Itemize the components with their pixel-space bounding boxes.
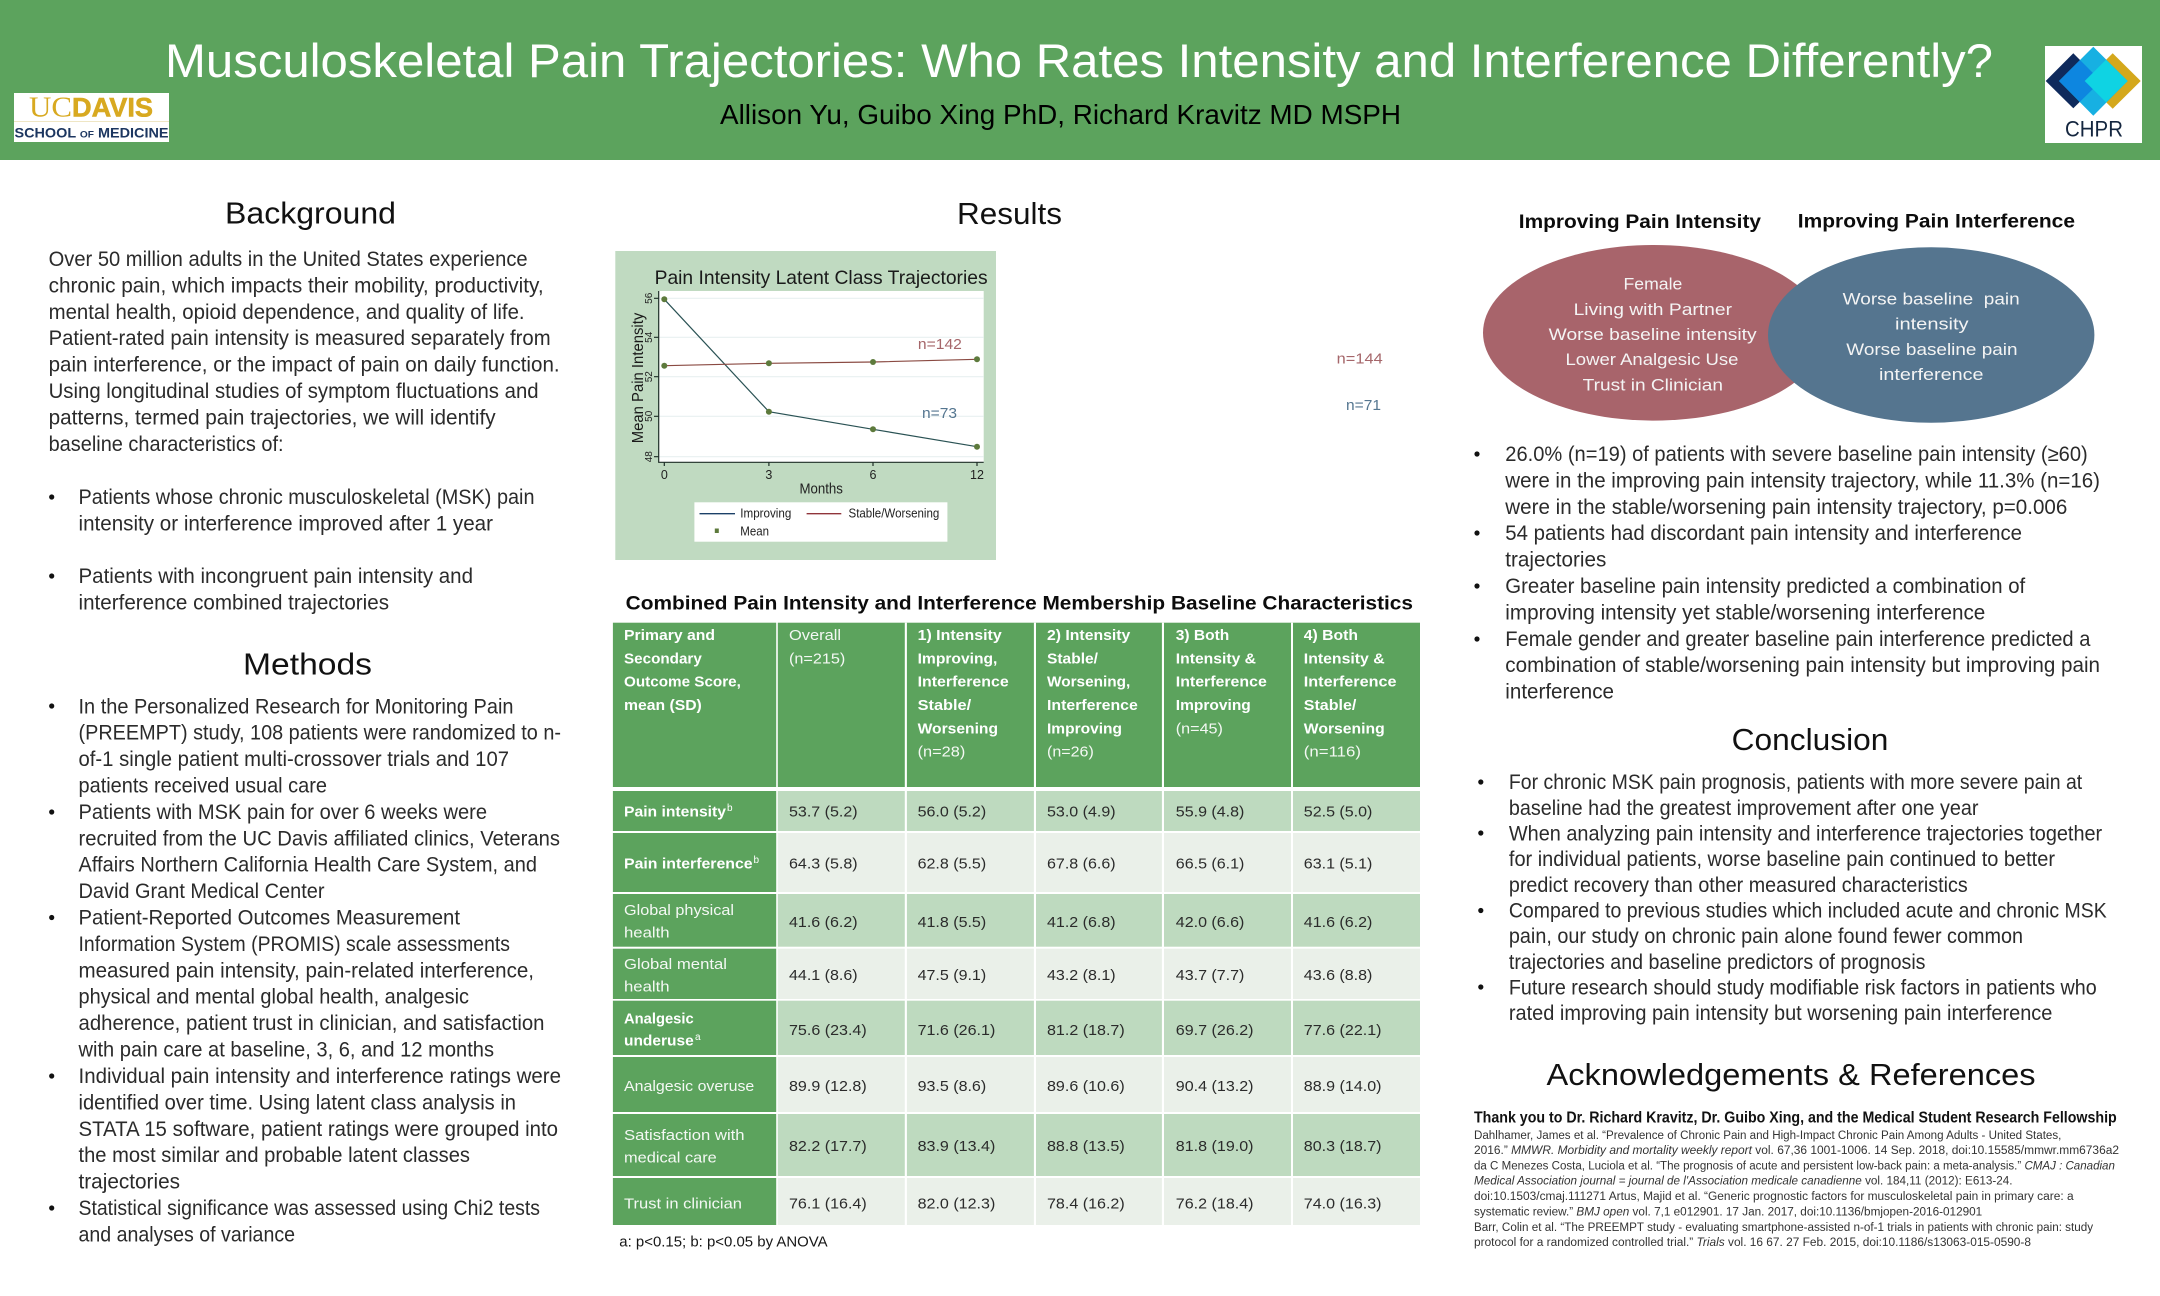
text block: references: Dahlhamer, James et al. “Prevalence of Chronic Pain and High-Impact Chronic Pain Among Adults - United States, xyxy=(1474,1130,2061,1142)
row: trust in clinician: 76.1 (16.4) xyxy=(789,1195,867,1212)
table header row: Outcome Score, xyxy=(624,674,741,691)
ellipse: pain interference predictors: Worse baseline pain xyxy=(1843,289,2020,308)
x axis labels: 12 xyxy=(970,468,984,482)
logo: UC Davis School of Medicine: DAVIS xyxy=(72,93,153,123)
heading: acknowledgements and references: Acknowledgements & References xyxy=(1546,1057,2036,1092)
ellipse: pain intensity predictors: Female xyxy=(1624,274,1682,293)
table header row: (n=26) xyxy=(1047,744,1094,761)
ellipse: pain intensity predictors: Lower Analgesic Use xyxy=(1566,350,1738,369)
panel: conclusion xyxy=(1478,722,2107,1025)
row: satisfaction with medical care: 88.8 (13.5) xyxy=(1047,1138,1125,1155)
row: trust in clinician: Trust in clinician xyxy=(624,1195,742,1212)
text block: references: systematic review.” BMJ open vol. 7,1 e012901. 17 Jan. 2017, doi:10.1136/bmjopen-2016-012901 xyxy=(1474,1207,1982,1219)
table header row: (n=215) xyxy=(789,650,845,667)
list: methods bullets: and analyses of variance xyxy=(78,1223,295,1246)
row: pain intensity: 52.5 (5.0) xyxy=(1304,804,1372,821)
list: methods bullets: patients received usual care xyxy=(78,774,327,798)
ellipse: pain intensity predictors xyxy=(1483,245,1825,421)
row: pain interference: b xyxy=(754,855,760,866)
list: methods bullets: measured pain intensity, pain-related interference, xyxy=(78,959,534,982)
table header row xyxy=(613,623,1420,787)
list: conclusion bullets: When analyzing pain intensity and interference trajectories together xyxy=(1509,823,2102,846)
text block: references: da C Menezes Costa, Luciola et al. “The prognosis of acute and persistent low-back pain: a meta-analysis.” CMAJ : Canadian xyxy=(1474,1160,2115,1172)
row: satisfaction with medical care: 81.8 (19.0) xyxy=(1176,1138,1254,1155)
row: satisfaction with medical care: 80.3 (18.7) xyxy=(1304,1138,1382,1155)
heading: improving pain intensity: Improving Pain Intensity xyxy=(1519,212,1761,233)
list: conclusion bullets: predict recovery than other measured characteristics xyxy=(1509,874,1968,897)
label: n=73: n=73 xyxy=(922,405,957,422)
label: n=142: n=142 xyxy=(918,336,962,353)
text block: references: protocol for a randomized controlled trial.” Trials vol. 16 67. 27 Feb. 2015, doi:10.1186/s13063-015-0590-8 xyxy=(1474,1237,2031,1249)
logo: CHPR: CHPR xyxy=(2065,117,2123,142)
list: methods bullets: identified over time. Using latent class analysis in xyxy=(78,1091,516,1114)
row: pain interference: Pain interference xyxy=(624,856,753,873)
table header row: Interference xyxy=(1047,697,1138,714)
list: methods bullets: recruited from the UC Davis affiliated clinics, Veterans xyxy=(78,827,560,850)
list: methods bullets: Statistical significance was assessed using Chi2 tests xyxy=(78,1197,540,1220)
y axis labels: 56 xyxy=(644,292,655,304)
row: analgesic underuse: 75.6 (23.4) xyxy=(789,1022,867,1039)
row: analgesic overuse: 89.9 (12.8) xyxy=(789,1078,867,1095)
list: methods bullets: (PREEMPT) study, 108 patients were randomized to n- xyxy=(78,722,561,745)
list: conclusion bullets: rated improving pain intensity but worsening pain interference xyxy=(1509,1002,2052,1025)
row: pain interference: 62.8 (5.5) xyxy=(918,856,986,873)
text block: background paragraph: Using longitudinal studies of symptom fluctuations and xyxy=(49,380,539,403)
row: pain intensity: 53.7 (5.2) xyxy=(789,804,858,821)
logo: CHPR xyxy=(2045,46,2142,143)
row: trust in clinician: 78.4 (16.2) xyxy=(1047,1195,1125,1212)
text block: background paragraph: baseline characteristics of: xyxy=(49,433,284,456)
line chart: pain intensity latent class trajectories xyxy=(615,251,996,560)
table header row: Intensity & xyxy=(1176,650,1256,667)
y axis labels: 50 xyxy=(644,410,655,422)
table header row: Interference xyxy=(918,674,1009,691)
text block: background paragraph: mental health, opioid dependence, and quality of life. xyxy=(49,301,525,324)
row: satisfaction with medical care: 83.9 (13.4) xyxy=(918,1138,995,1155)
row: global mental health: health xyxy=(624,979,670,996)
list: background bullets: Patients whose chronic musculoskeletal (MSK) pain xyxy=(78,486,534,509)
authors: Allison Yu, Guibo Xing PhD, Richard Kravitz MD MSPH xyxy=(720,99,1401,130)
list: results bullets: were in the improving pain intensity trajectory, while 11.3% (n=16) xyxy=(1504,469,2100,492)
chart title: Pain Intensity Latent Class Trajectories xyxy=(655,267,988,289)
list: methods bullets: of-1 single patient multi-crossover trials and 107 xyxy=(78,748,509,771)
row: trust in clinician xyxy=(613,1178,1420,1225)
y axis labels: 52 xyxy=(644,371,655,382)
logo: UC Davis School of Medicine xyxy=(14,93,169,142)
ellipse: pain intensity predictors: Living with Partner xyxy=(1574,300,1732,319)
list: background bullets xyxy=(49,486,534,614)
title: Musculoskeletal Pain Trajectories: Who Rates Intensity and Interference Differently? xyxy=(165,34,1993,87)
text block: background paragraph xyxy=(49,248,560,456)
row: global physical health: 42.0 (6.6) xyxy=(1176,914,1244,931)
row: analgesic underuse: Analgesic xyxy=(624,1010,694,1027)
row: global physical health: 41.8 (5.5) xyxy=(918,914,986,931)
ellipse: pain intensity predictors: Trust in Clinician xyxy=(1583,376,1723,395)
row: analgesic underuse: a xyxy=(695,1032,701,1043)
list: background bullets: interference combined trajectories xyxy=(78,591,389,614)
row: trust in clinician: 82.0 (12.3) xyxy=(918,1195,995,1212)
label: n=71: n=71 xyxy=(1346,397,1381,414)
panel: background xyxy=(49,196,560,614)
list: results bullets: trajectories xyxy=(1505,549,1606,572)
table: baseline characteristics xyxy=(613,623,1420,1226)
ellipse: pain intensity predictors: Worse baseline intensity xyxy=(1549,325,1757,344)
list: methods bullets: David Grant Medical Center xyxy=(78,880,325,903)
table header row: Primary and xyxy=(624,627,715,644)
row: pain interference xyxy=(613,833,1420,892)
table header row: Stable/ xyxy=(1047,650,1099,667)
y axis labels: 54 xyxy=(644,331,655,343)
row: pain intensity xyxy=(613,791,1420,831)
list: results bullets: combination of stable/worsening pain intensity but improving pain xyxy=(1505,654,2100,677)
list: conclusion bullets: trajectories and baseline predictors of prognosis xyxy=(1509,951,1926,974)
list: conclusion bullets: pain, our study on chronic pain alone found fewer common xyxy=(1509,925,2023,948)
list: methods bullets: In the Personalized Research for Monitoring Pain xyxy=(78,695,514,718)
row: satisfaction with medical care: medical care xyxy=(624,1150,717,1167)
x axis labels: 0 xyxy=(661,468,668,482)
table footnote: a: p<0.15; b: p<0.05 by ANOVA xyxy=(619,1235,828,1251)
table header row: 4) Both xyxy=(1304,627,1358,644)
table header row: Stable/ xyxy=(918,697,972,714)
list: methods bullets: trajectories xyxy=(78,1171,180,1194)
row: global mental health: 44.1 (8.6) xyxy=(789,967,858,984)
row: global physical health: 41.6 (6.2) xyxy=(789,914,858,931)
row: pain intensity: b xyxy=(727,803,733,814)
row: satisfaction with medical care: 82.2 (17.7) xyxy=(789,1138,867,1155)
text block: background paragraph: Patient-rated pain intensity is measured separately from xyxy=(49,327,551,350)
list: results bullets: Female gender and greater baseline pain interference predicted a xyxy=(1505,628,2091,651)
list: results bullets: were in the stable/worsening pain intensity trajectory, p=0.006 xyxy=(1504,496,2067,519)
panel: acknowledgements and references xyxy=(1474,1057,2119,1249)
table header row: Improving xyxy=(1047,720,1122,737)
table header row: Worsening xyxy=(1304,720,1385,737)
list: results bullets: 26.0% (n=19) of patients with severe baseline pain intensity (≥60) xyxy=(1505,443,2088,466)
table header row: (n=45) xyxy=(1176,720,1223,737)
row: global mental health: 43.6 (8.8) xyxy=(1304,967,1372,984)
row: global mental health: 47.5 (9.1) xyxy=(918,967,986,984)
heading: methods: Methods xyxy=(243,647,372,682)
list: background bullets: Patients with incongruent pain intensity and xyxy=(78,565,473,588)
venn diagram: predictors of improving intensity and interference xyxy=(1483,211,2094,423)
acknowledgement line: Thank you to Dr. Richard Kravitz, Dr. Guibo Xing, and the Medical Student Research Fellowship xyxy=(1474,1109,2117,1126)
text block: background paragraph: pain interference, or the impact of pain on daily function. xyxy=(49,354,560,377)
list: results bullets: improving intensity yet stable/worsening interference xyxy=(1505,601,1985,624)
table header row: Overall xyxy=(789,627,841,644)
table header row: 2) Intensity xyxy=(1047,627,1131,644)
row: global physical health: health xyxy=(624,925,670,942)
table header row: Intensity & xyxy=(1304,650,1385,667)
row: satisfaction with medical care xyxy=(613,1114,1420,1176)
list: methods bullets: the most similar and probable latent classes xyxy=(78,1144,470,1167)
text block: references: doi:10.1503/cmaj.111271 Artus, Majid et al. “Generic prognostic factors for musculoskeletal pain in primary care: a xyxy=(1474,1191,2074,1203)
panel: methods xyxy=(49,647,561,1246)
list: methods bullets: STATA 15 software, patient ratings were grouped into xyxy=(78,1118,558,1141)
text block: references xyxy=(1474,1130,2119,1249)
table header row: Interference xyxy=(1304,674,1396,691)
table heading: Combined Pain Intensity and Interference Membership Baseline Characteristics xyxy=(626,592,1413,614)
x axis labels xyxy=(661,468,984,497)
table header row: Worsening, xyxy=(1047,674,1130,691)
list: methods bullets: with pain care at baseline, 3, 6, and 12 months xyxy=(78,1038,494,1062)
list: conclusion bullets: For chronic MSK pain prognosis, patients with more severe pain at xyxy=(1509,771,2082,794)
table header row: Secondary xyxy=(624,650,702,667)
list: results bullets: interference xyxy=(1505,681,1614,704)
legend: Improving xyxy=(740,507,791,521)
row: pain intensity: 53.0 (4.9) xyxy=(1047,804,1116,821)
list: results bullets: Greater baseline pain intensity predicted a combination of xyxy=(1505,575,2025,598)
list: conclusion bullets: baseline had the greatest improvement after one year xyxy=(1509,797,1979,820)
row: analgesic underuse: 69.7 (26.2) xyxy=(1176,1022,1254,1039)
text block: background paragraph: Over 50 million adults in the United States experience xyxy=(49,248,528,271)
list: methods bullets: Information System (PROMIS) scale assessments xyxy=(78,933,510,956)
list: conclusion bullets: Future research should study modifiable risk factors in patients who xyxy=(1509,976,2097,999)
y axis labels: 48 xyxy=(644,451,655,462)
table header row: Stable/ xyxy=(1304,697,1357,714)
table header row: (n=28) xyxy=(918,744,965,761)
row: global mental health: 43.2 (8.1) xyxy=(1047,967,1116,984)
row: analgesic underuse xyxy=(613,1001,1420,1055)
row: trust in clinician: 76.2 (18.4) xyxy=(1176,1195,1254,1212)
row: analgesic underuse: 71.6 (26.1) xyxy=(918,1022,995,1039)
legend: Stable/Worsening xyxy=(848,507,939,521)
label: n=144: n=144 xyxy=(1337,350,1383,367)
mean markers xyxy=(661,296,980,450)
text block: references: Medical Association journal = journal de l'Association medicale canadienne vol. 184,11 (2012): E613-24. xyxy=(1474,1176,2012,1188)
x axis labels: 3 xyxy=(765,468,772,482)
list: methods bullets: adherence, patient trust in clinician, and satisfaction xyxy=(78,1012,544,1035)
row: trust in clinician: 74.0 (16.3) xyxy=(1304,1195,1382,1212)
logo: UC Davis School of Medicine: SCHOOL OF MEDICINE xyxy=(14,125,168,140)
row: analgesic overuse: 90.4 (13.2) xyxy=(1176,1078,1254,1095)
y axis labels: Mean Pain Intensity xyxy=(630,313,647,443)
list: methods bullets: Individual pain intensity and interference ratings were xyxy=(78,1065,561,1088)
list: conclusion bullets: Compared to previous studies which included acute and chronic MSK xyxy=(1509,899,2107,922)
row: pain intensity: 56.0 (5.2) xyxy=(918,804,986,821)
ellipse: pain interference predictors: interference xyxy=(1879,365,1984,384)
row: global physical health: Global physical xyxy=(624,902,734,919)
list: results bullets: 54 patients had discordant pain intensity and interference xyxy=(1505,522,2022,545)
table header row: mean (SD) xyxy=(624,697,702,714)
row: pain intensity: Pain intensity xyxy=(624,804,727,821)
list: methods bullets: Patients with MSK pain for over 6 weeks were xyxy=(78,801,487,824)
heading: background: Background xyxy=(225,196,396,231)
row: global mental health: 43.7 (7.7) xyxy=(1176,967,1244,984)
x axis labels: Months xyxy=(800,481,843,497)
row: pain interference: 66.5 (6.1) xyxy=(1176,856,1244,873)
legend: Mean xyxy=(740,524,769,538)
logo: UC Davis School of Medicine: UC xyxy=(29,93,72,124)
row: analgesic underuse: 81.2 (18.7) xyxy=(1047,1022,1125,1039)
ellipse: pain interference predictors: Worse baseline pain xyxy=(1846,340,2018,359)
table header row: 3) Both xyxy=(1176,627,1229,644)
text block: references: Barr, Colin et al. “The PREEMPT study - evaluating smartphone-assisted n-of-1 trials in patients with chronic pain: study xyxy=(1474,1222,2093,1234)
list: methods bullets xyxy=(49,695,561,1246)
table header row: Improving xyxy=(1176,697,1251,714)
row: analgesic overuse xyxy=(613,1057,1420,1112)
list: methods bullets: Affairs Northern California Health Care System, and xyxy=(78,854,537,877)
text block: background paragraph: patterns, termed pain trajectories, we will identify xyxy=(49,406,496,429)
legend xyxy=(694,502,947,542)
list: results bullets xyxy=(1474,443,2100,704)
row: global physical health: 41.2 (6.8) xyxy=(1047,914,1116,931)
series: improving xyxy=(664,299,977,447)
row: global mental health xyxy=(613,949,1420,999)
row: analgesic underuse: 77.6 (22.1) xyxy=(1304,1022,1382,1039)
text block: references: 2016.” MMWR. Morbidity and mortality weekly report vol. 67,36 1001-1006. 14 Sep. 2018, doi:10.15585/mmwr.mm6736a2 xyxy=(1474,1145,2119,1157)
row: pain interference: 67.8 (6.6) xyxy=(1047,856,1116,873)
x axis labels: 6 xyxy=(870,468,877,482)
text block: background paragraph: chronic pain, which impacts their mobility, productivity, xyxy=(49,274,544,297)
y axis labels xyxy=(630,292,655,462)
row: pain interference: 63.1 (5.1) xyxy=(1304,856,1372,873)
heading: conclusion: Conclusion xyxy=(1732,722,1888,757)
list: methods bullets: Patient-Reported Outcomes Measurement xyxy=(78,906,460,930)
row: global physical health: 41.6 (6.2) xyxy=(1304,914,1372,931)
row: pain intensity: 55.9 (4.8) xyxy=(1176,804,1244,821)
ellipse: pain interference predictors: intensity xyxy=(1895,314,1969,333)
list: conclusion bullets xyxy=(1478,771,2107,1025)
table header row: 1) Intensity xyxy=(918,627,1002,644)
ellipse: pain interference predictors xyxy=(1768,247,2094,423)
list: background bullets: intensity or interference improved after 1 year xyxy=(78,512,493,535)
row: analgesic overuse: 89.6 (10.6) xyxy=(1047,1078,1125,1095)
row: analgesic overuse: 93.5 (8.6) xyxy=(918,1078,986,1095)
header banner xyxy=(0,0,2160,160)
table header row: Worsening xyxy=(918,720,998,737)
row: pain interference: 64.3 (5.8) xyxy=(789,856,858,873)
list: methods bullets: physical and mental global health, analgesic xyxy=(78,986,469,1009)
heading: improving pain interference: Improving Pain Interference xyxy=(1798,211,2075,232)
table header row: Improving, xyxy=(918,650,997,667)
row: analgesic overuse: 88.9 (14.0) xyxy=(1304,1078,1382,1095)
table header row: (n=116) xyxy=(1304,744,1361,761)
row: global physical health xyxy=(613,894,1420,947)
table header row: Interference xyxy=(1176,674,1267,691)
list: conclusion bullets: for individual patients, worse baseline pain continued to better xyxy=(1509,848,2055,871)
row: analgesic underuse: underuse xyxy=(624,1033,694,1050)
heading: results: Results xyxy=(957,196,1062,231)
row: analgesic overuse: Analgesic overuse xyxy=(624,1078,754,1095)
row: global mental health: Global mental xyxy=(624,956,727,973)
row: satisfaction with medical care: Satisfaction with xyxy=(624,1127,745,1144)
series: stable/worsening xyxy=(664,359,977,366)
